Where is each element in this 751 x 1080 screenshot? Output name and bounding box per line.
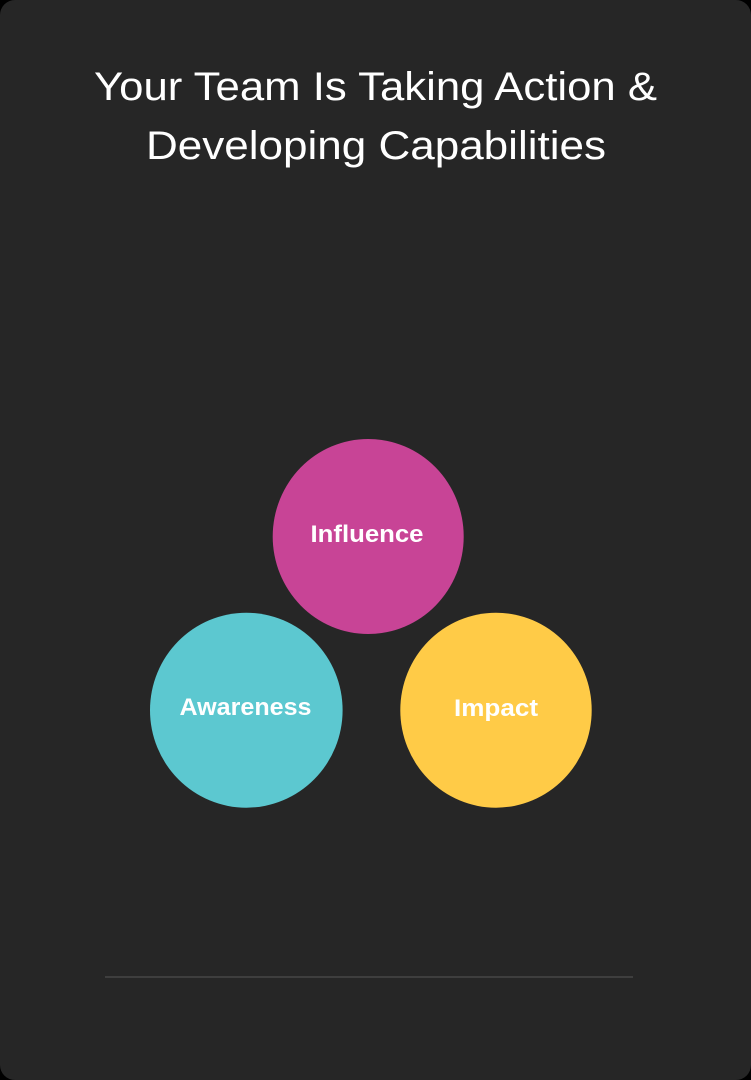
circle: Influence — [273, 439, 464, 634]
title: Your Team Is Taking Action & — [94, 65, 657, 109]
title: Developing Capabilities — [146, 124, 606, 168]
circle: Impact: Impact — [454, 695, 538, 722]
divider line — [105, 976, 633, 978]
circle: Impact — [400, 613, 592, 808]
circle: Influence: Influence — [310, 521, 424, 548]
title — [94, 65, 657, 168]
circle: Awareness — [150, 613, 343, 808]
circle: Awareness: Awareness — [180, 694, 312, 721]
